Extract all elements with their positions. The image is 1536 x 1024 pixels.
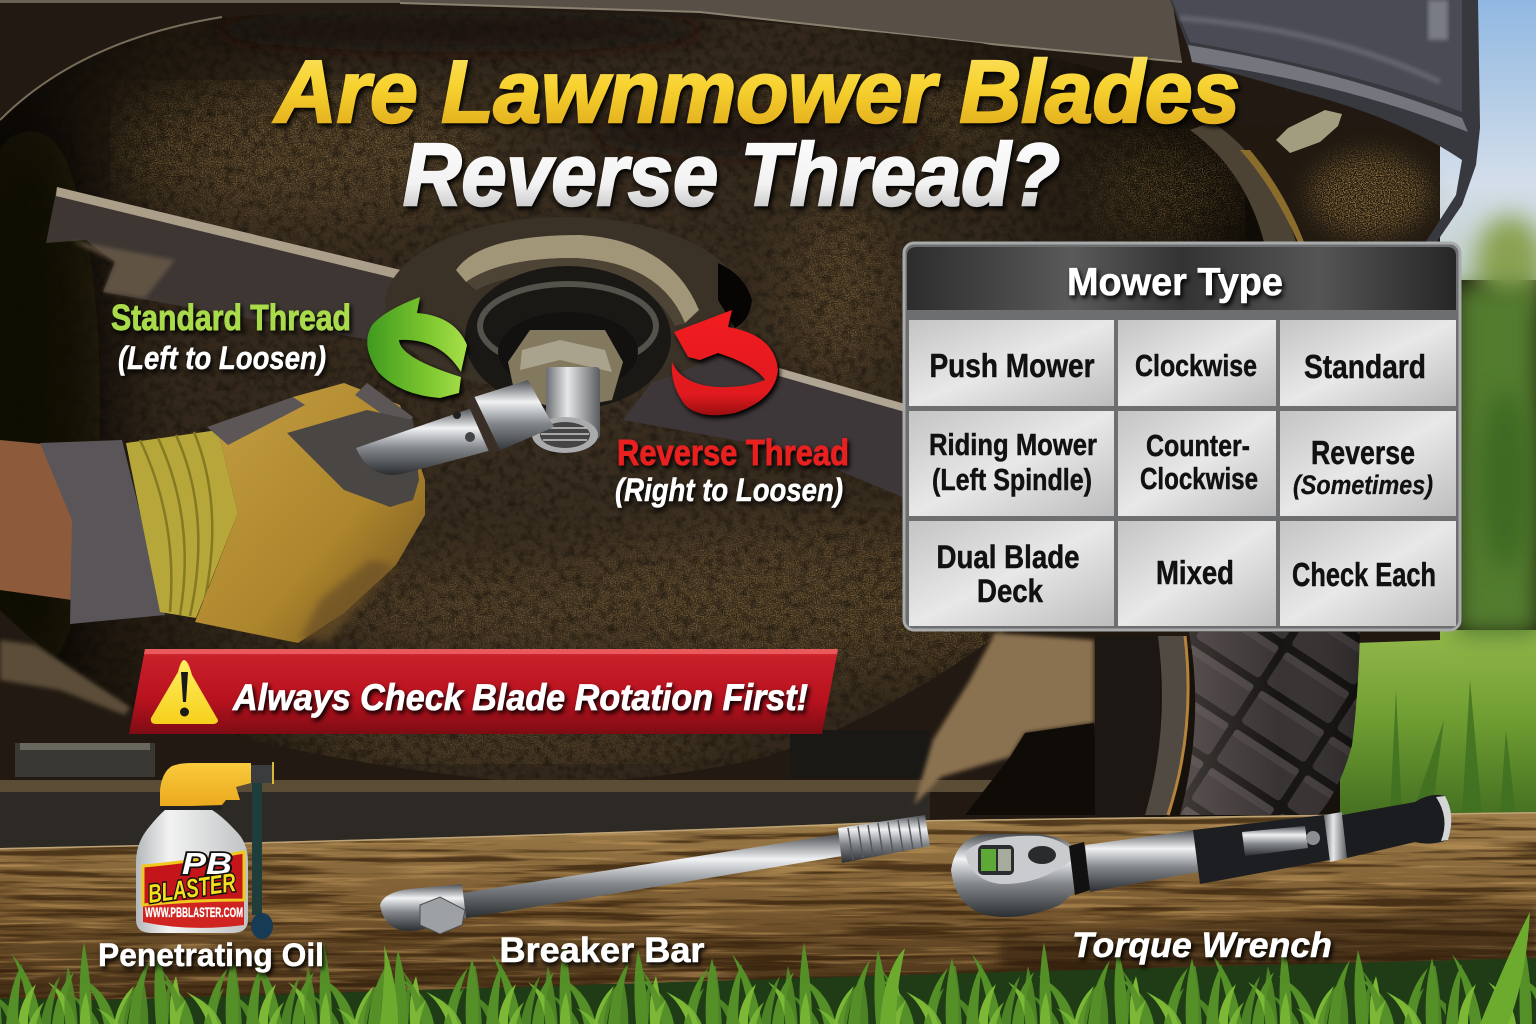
tire bbox=[1180, 632, 1360, 815]
table row: push mower: Standard bbox=[1304, 348, 1426, 385]
table row: riding mower bbox=[909, 411, 1456, 516]
table row: dual blade deck: Mixed bbox=[1156, 554, 1234, 591]
metal fender bbox=[1170, 0, 1480, 243]
tool: penetrating oil can bbox=[136, 762, 274, 939]
mud lump and wheel rim bbox=[914, 633, 1188, 820]
label: breaker bar: Breaker Bar bbox=[500, 931, 705, 970]
gloved hand bbox=[0, 383, 425, 643]
icon: red rotation arrow bbox=[672, 310, 778, 415]
label: torque wrench: Torque Wrench bbox=[1072, 926, 1332, 965]
table heading bbox=[907, 247, 1456, 310]
table row: push mower: Clockwise bbox=[1135, 348, 1257, 383]
table row: riding mower: (Left Spindle) bbox=[932, 462, 1092, 497]
warning banner bbox=[129, 649, 838, 734]
deck disk bbox=[0, 0, 1320, 800]
tool: penetrating oil can: BLASTER bbox=[146, 867, 238, 909]
title bbox=[273, 42, 1240, 224]
label: reverse thread bbox=[615, 432, 849, 508]
label: penetrating oil: Penetrating Oil bbox=[98, 937, 324, 973]
table row: push mower bbox=[909, 320, 1456, 406]
icon: green rotation arrow bbox=[367, 297, 467, 398]
table row: riding mower: (Sometimes) bbox=[1293, 470, 1433, 500]
warning banner: Always Check Blade Rotation First! bbox=[232, 677, 808, 718]
table row: riding mower: Riding Mower bbox=[929, 427, 1097, 462]
label: standard thread: Standard Thread bbox=[111, 297, 351, 338]
label: standard thread: (Left to Loosen) bbox=[118, 340, 326, 376]
icon: warning triangle bbox=[151, 660, 218, 724]
grass foreground bbox=[0, 912, 1536, 1024]
table row: push mower: Push Mower bbox=[930, 347, 1095, 384]
tool: torque wrench bbox=[951, 795, 1451, 917]
blade spindle and nut bbox=[385, 217, 752, 453]
table row: riding mower: Counter- bbox=[1146, 428, 1250, 463]
tool: penetrating oil can: WWW.PBBLASTER.COM bbox=[145, 904, 243, 920]
socket extension tool bbox=[356, 380, 554, 475]
table row: dual blade deck bbox=[909, 521, 1456, 626]
table row: riding mower: Reverse bbox=[1311, 434, 1415, 471]
title: Are Lawnmower Blades bbox=[273, 42, 1240, 141]
table row: riding mower: Clockwise bbox=[1140, 461, 1258, 496]
mower blade bbox=[46, 187, 905, 498]
table row: dual blade deck: Dual Blade bbox=[936, 539, 1080, 575]
wooden plank bbox=[0, 810, 1536, 1005]
table row: dual blade deck: Check Each bbox=[1292, 556, 1436, 593]
lower-left tan strut bbox=[0, 640, 130, 715]
outer housing behind the deck bbox=[0, 0, 1440, 820]
tool: penetrating oil can: PB bbox=[182, 846, 232, 881]
tool: breaker bar bbox=[380, 815, 930, 934]
lower chassis bbox=[15, 743, 155, 777]
table row: dual blade deck: Deck bbox=[977, 573, 1043, 609]
table heading: Mower Type bbox=[1067, 261, 1283, 304]
title: Reverse Thread? bbox=[403, 125, 1060, 224]
wheel-well metal ring and rough dirt bbox=[1190, 122, 1296, 242]
label: reverse thread: Reverse Thread bbox=[617, 432, 849, 473]
label: standard thread bbox=[111, 297, 351, 376]
label: reverse thread: (Right to Loosen) bbox=[615, 472, 843, 508]
panel: mower type table bbox=[904, 243, 1460, 630]
